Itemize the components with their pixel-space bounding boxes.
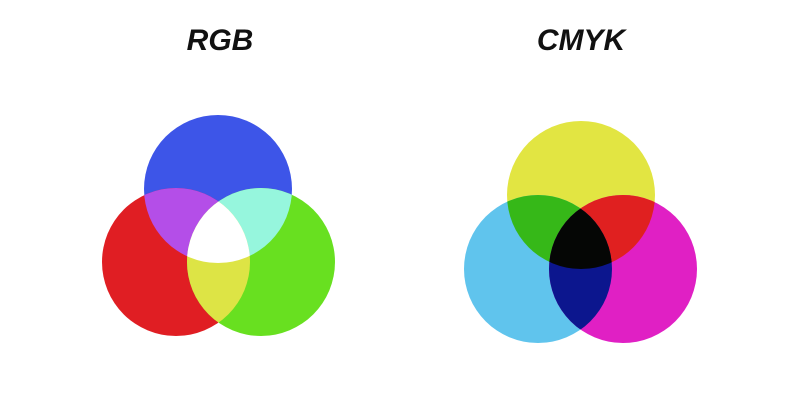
diagram: CMYK subtractive circles bbox=[464, 121, 697, 343]
title: RGB: RGB bbox=[187, 24, 253, 57]
diagram: RGB additive circles bbox=[102, 115, 335, 336]
title: CMYK: CMYK bbox=[537, 24, 627, 57]
